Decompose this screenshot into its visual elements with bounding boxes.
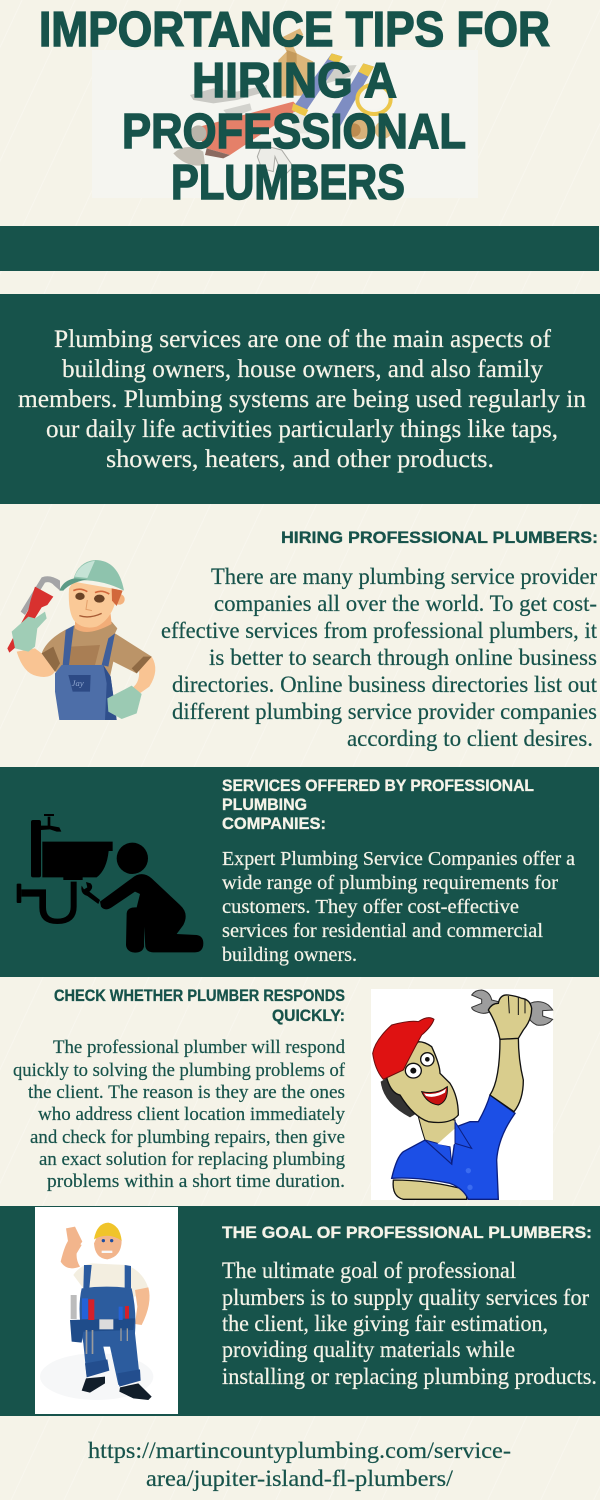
intro paragraph: building owners, house owners, and also family: [62, 354, 543, 383]
panel: hiring professional plumbers: [7, 528, 598, 751]
icon: plumber with red wrench: Jay: [72, 678, 84, 688]
services paragraph: Expert Plumbing Service Companies offer a: [222, 848, 575, 870]
services paragraph: building owners.: [222, 944, 357, 966]
heading: services: [222, 776, 534, 833]
panel: check whether plumber responds: [13, 986, 553, 1200]
services paragraph: services for residential and commercial: [222, 920, 543, 942]
check paragraph: an exact solution for replacing plumbing: [39, 1150, 345, 1170]
goal paragraph: [222, 1258, 597, 1389]
services paragraph: [222, 848, 575, 966]
heading: check: [54, 986, 345, 1025]
goal paragraph: plumbers is to supply quality services for: [222, 1285, 589, 1310]
icon: plumber fixing sink: [17, 814, 203, 953]
services paragraph: wide range of plumbing requirements for: [222, 872, 558, 894]
hiring paragraph: directories. Online business directories list out: [172, 672, 598, 697]
check paragraph: [13, 1038, 346, 1192]
hiring paragraph: companies all over the world. To get cost-: [214, 591, 597, 616]
heading: services: SERVICES OFFERED BY PROFESSIONAL: [222, 776, 534, 795]
goal paragraph: providing quality materials while: [222, 1337, 515, 1362]
check paragraph: problems within a short time duration.: [47, 1172, 345, 1192]
image: cartoon plumber raising wrench: [371, 989, 553, 1200]
title: PLUMBERS: [171, 156, 405, 210]
heading: check: CHECK WHETHER PLUMBER RESPONDS: [54, 986, 345, 1005]
heading: services: COMPANIES:: [222, 814, 326, 833]
panel: services offered: [0, 767, 599, 977]
title: [39, 3, 550, 210]
hiring paragraph: according to client desires.: [347, 726, 593, 751]
hiring paragraph: effective services from professional plumbers, it: [161, 618, 598, 643]
panel: goal of professional plumbers: [0, 1206, 600, 1416]
intro paragraph: [18, 324, 586, 473]
check paragraph: and check for plumbing repairs, then give: [30, 1128, 345, 1148]
panel: introduction: [0, 294, 600, 504]
intro paragraph: members. Plumbing systems are being used regularly in: [18, 384, 586, 413]
icon: plumber with red wrench: [7, 560, 155, 720]
check paragraph: who address client location immediately: [38, 1105, 346, 1125]
intro paragraph: our daily life activities particularly things like taps,: [46, 414, 558, 443]
services paragraph: customers. They offer cost-effective: [222, 896, 519, 918]
heading: check: QUICKLY:: [272, 1006, 345, 1025]
title: HIRING A: [192, 54, 397, 108]
footer URL: [88, 1438, 511, 1492]
image: plumber in overalls with hard hat: [35, 1207, 178, 1414]
check paragraph: quickly to solving the plumbing problems of: [13, 1061, 346, 1081]
heading: hiring: HIRING PROFESSIONAL PLUMBERS:: [281, 528, 598, 547]
empty banner bar: [0, 226, 599, 271]
image: plumbing tools behind title: [92, 28, 478, 198]
heading: goal: THE GOAL OF PROFESSIONAL PLUMBERS:: [222, 1223, 592, 1242]
intro paragraph: showers, heaters, and other products.: [106, 444, 494, 473]
hiring paragraph: different plumbing service provider companies: [172, 699, 597, 724]
goal paragraph: installing or replacing plumbing products.: [222, 1364, 597, 1389]
title: IMPORTANCE TIPS FOR: [39, 3, 550, 57]
hiring paragraph: There are many plumbing service provider: [211, 564, 597, 589]
heading: services: PLUMBING: [222, 795, 307, 814]
check paragraph: The professional plumber will respond: [53, 1038, 346, 1058]
footer URL: area/jupiter-island-fl-plumbers/: [146, 1466, 453, 1492]
title: PROFESSIONAL: [122, 105, 466, 159]
goal paragraph: the client, like giving fair estimation,: [222, 1311, 548, 1336]
goal paragraph: The ultimate goal of professional: [222, 1258, 516, 1283]
hiring paragraph: [161, 564, 598, 751]
hiring paragraph: is better to search through online business: [209, 645, 597, 670]
check paragraph: the client. The reason is they are the ones: [28, 1083, 345, 1103]
intro paragraph: Plumbing services are one of the main aspects of: [54, 324, 551, 353]
footer URL: https://martincountyplumbing.com/service-: [88, 1438, 511, 1464]
